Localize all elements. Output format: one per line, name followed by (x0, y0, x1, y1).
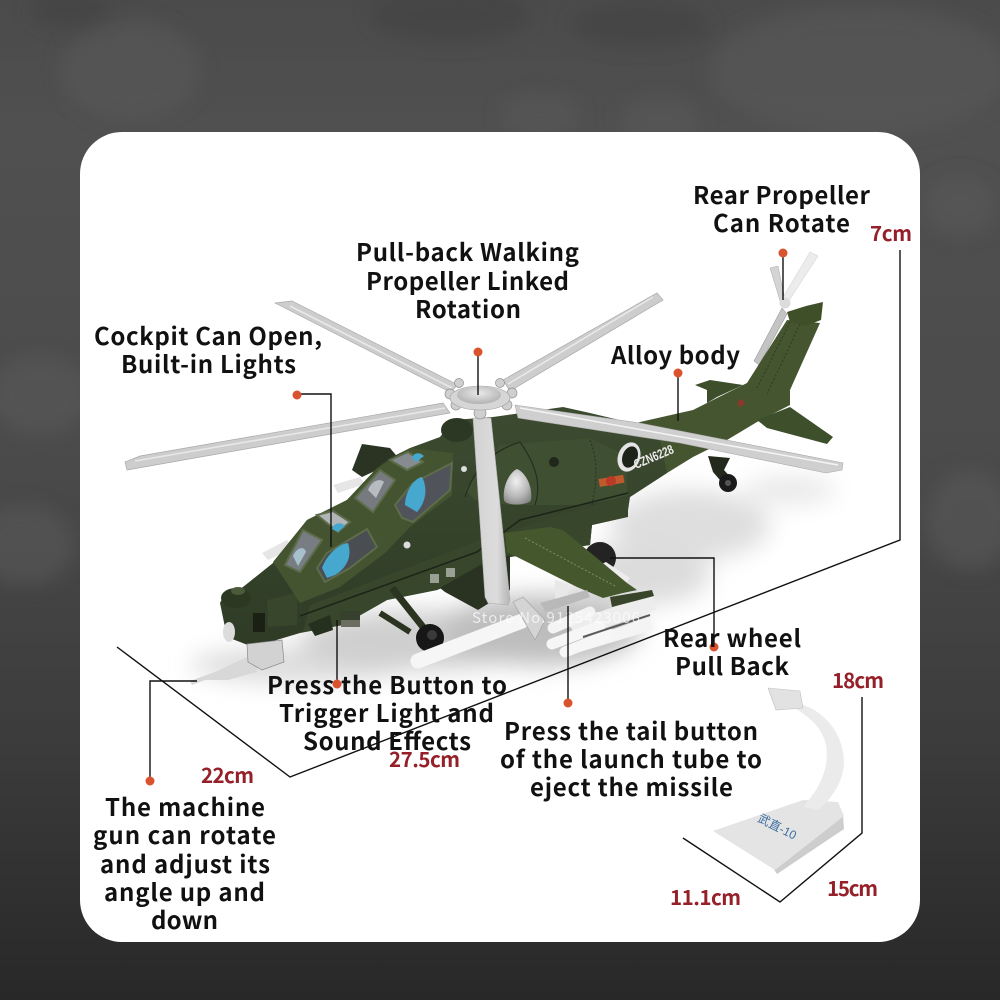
callout: rear propeller: Rear Propeller (693, 176, 871, 211)
dimension labels: 7cm (870, 217, 912, 247)
canopy frame (273, 448, 453, 603)
callout: alloy body (610, 336, 740, 421)
dimension lines: helicopter (117, 250, 900, 777)
cockpit seats (293, 453, 425, 578)
callout: machine gun: The machine (105, 788, 265, 823)
dimension labels (201, 217, 912, 911)
cockpit windows (285, 452, 452, 582)
model display stand: 武直-10 (756, 811, 799, 843)
ground shadow under helicopter (190, 476, 835, 683)
callout: sound button (267, 620, 507, 757)
right main rotor blade (515, 405, 843, 473)
callout: machine gun (93, 681, 276, 936)
front main rotor blade (473, 418, 510, 605)
callout: rear wheel: Rear wheel (663, 619, 801, 654)
dimension labels: 22cm (201, 759, 254, 789)
callout: rear wheel: Pull Back (675, 647, 790, 682)
watermark: Store No.9125423006 (472, 607, 640, 628)
sensor dome (504, 469, 531, 505)
callout: rear wheel (610, 558, 801, 682)
callout: cockpit: Cockpit Can Open, (94, 317, 322, 352)
callout: machine gun: angle up and (104, 873, 265, 908)
dimension labels: 11.1cm (670, 881, 741, 911)
rotor hub (445, 378, 517, 419)
star emblem (598, 474, 625, 488)
callout: machine gun: gun can rotate (93, 816, 276, 851)
callout: pull-back walking: Propeller Linked (366, 262, 569, 297)
rear rotor blades (754, 252, 818, 365)
callout: sound button: Sound Effects (303, 722, 471, 757)
callout: machine gun: down (151, 901, 218, 936)
callout: rear propeller: Can Rotate (713, 204, 850, 239)
dimension labels: 18cm (832, 664, 884, 694)
missile launchers (418, 580, 656, 661)
engine intake (614, 439, 644, 475)
machine gun (190, 640, 284, 685)
dimension labels: 27.5cm (389, 743, 460, 773)
callout: pull-back walking: Rotation (415, 290, 521, 325)
callout: cockpit: Built-in Lights (121, 345, 296, 380)
tail wheel (708, 456, 737, 492)
helicopter model (125, 252, 843, 685)
rear side weapon pods behind cockpit (262, 444, 400, 560)
fuselage (220, 407, 667, 647)
callout: sound button: Press the Button to (267, 666, 507, 701)
callout: alloy body: Alloy body (610, 336, 740, 371)
callout: pull-back walking (356, 233, 579, 395)
nose landing gear (380, 588, 444, 652)
dimension labels: 15cm (827, 872, 878, 902)
tail boom and fin (600, 302, 833, 500)
callout: sound button: Trigger Light and (279, 694, 494, 729)
callout: missile ejection: eject the missile (530, 768, 733, 803)
tail number: CZN6228 (631, 442, 676, 472)
callout: missile ejection (500, 606, 762, 803)
dimension lines: stand (683, 697, 862, 902)
callout: missile ejection: of the launch tube to (500, 740, 762, 775)
rear main rotor blades (125, 293, 663, 470)
model display stand (713, 688, 844, 874)
callout: missile ejection: Press the tail button (504, 712, 758, 747)
panel: white rounded card (80, 132, 920, 942)
callout: pull-back walking: Pull-back Walking (356, 233, 579, 268)
callout: rear propeller (693, 176, 871, 300)
callout: machine gun: and adjust its (100, 845, 270, 880)
callout: cockpit (94, 317, 331, 547)
stub wing (505, 527, 637, 598)
rear landing wheel (584, 542, 630, 587)
